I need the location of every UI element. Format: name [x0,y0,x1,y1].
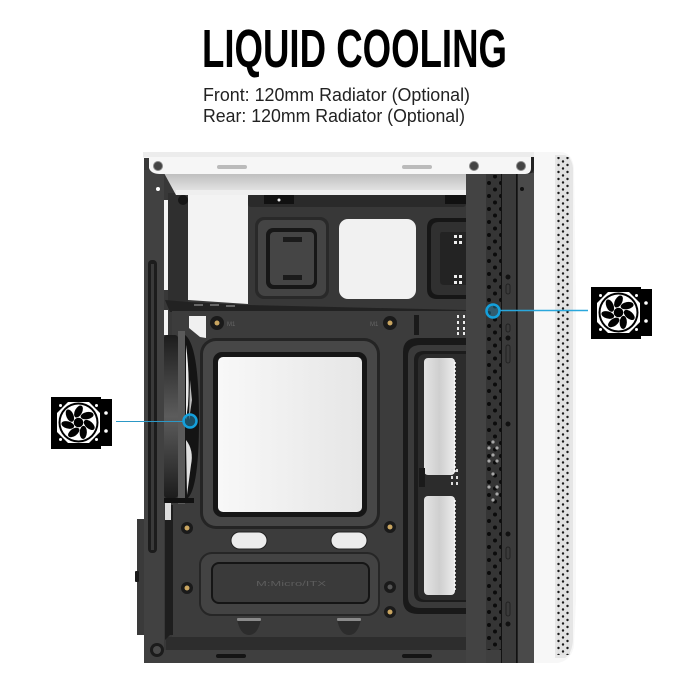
oval cutouts [231,532,367,549]
white slit [164,200,168,335]
subtitle text block [203,85,470,126]
top square window [339,219,416,299]
dark bay post [168,193,188,302]
standoff labels: M1 [227,322,236,328]
upper right slot [424,358,455,475]
case base [144,156,534,663]
main window [218,357,362,512]
rear fan [164,331,199,504]
bottom screws [150,643,528,657]
outer right rail [517,173,534,663]
lighter holes in the column [487,440,499,502]
left lower drive cage bump [135,519,145,635]
subtitle text block: Front: 120mm Radiator (Optional) [203,85,470,105]
right chassis column [466,173,486,663]
white top frame [143,152,534,174]
tiny holes between slots [451,469,458,485]
subtitle text block: Rear: 120mm Radiator (Optional) [203,106,465,126]
small white cutout [189,316,206,338]
top left embossed plate [255,217,329,299]
top inner lip [164,173,466,195]
bottom floor [144,637,534,663]
standoff labels: M1 [370,322,379,328]
upper white bay [188,190,248,304]
white front panel [534,152,576,663]
icon: radiator fan right [591,287,652,339]
standoff labels [227,322,379,328]
title: LIQUID COOLING [202,19,507,79]
rear panel top strip [248,195,466,207]
left side rail [144,170,164,662]
standoff holes by crossbar [457,315,465,335]
rear perforated column [486,175,501,650]
bottom half-round tabs [237,618,361,635]
main window frame [200,338,380,529]
callout: front radiator [486,304,588,318]
lower right slot [424,496,455,595]
marker circle [184,414,196,428]
icon: radiator fan left [51,397,112,449]
standoffs [181,316,397,618]
cable grommet strip [165,505,173,640]
callout: rear radiator [116,414,196,428]
main motherboard tray [172,311,466,651]
PC case interior [135,156,534,663]
narrow rail with holes [501,173,517,663]
lower embossed plate [200,553,379,615]
lower embossed plate: M:Micro/ITX [256,581,327,588]
connector line [116,420,183,422]
top right embossed plate [427,218,466,299]
right slots frame [403,338,466,614]
front panel perforation strip [557,157,570,655]
top crossbar [165,300,466,312]
connector line [499,310,588,312]
marker circle [486,304,500,318]
